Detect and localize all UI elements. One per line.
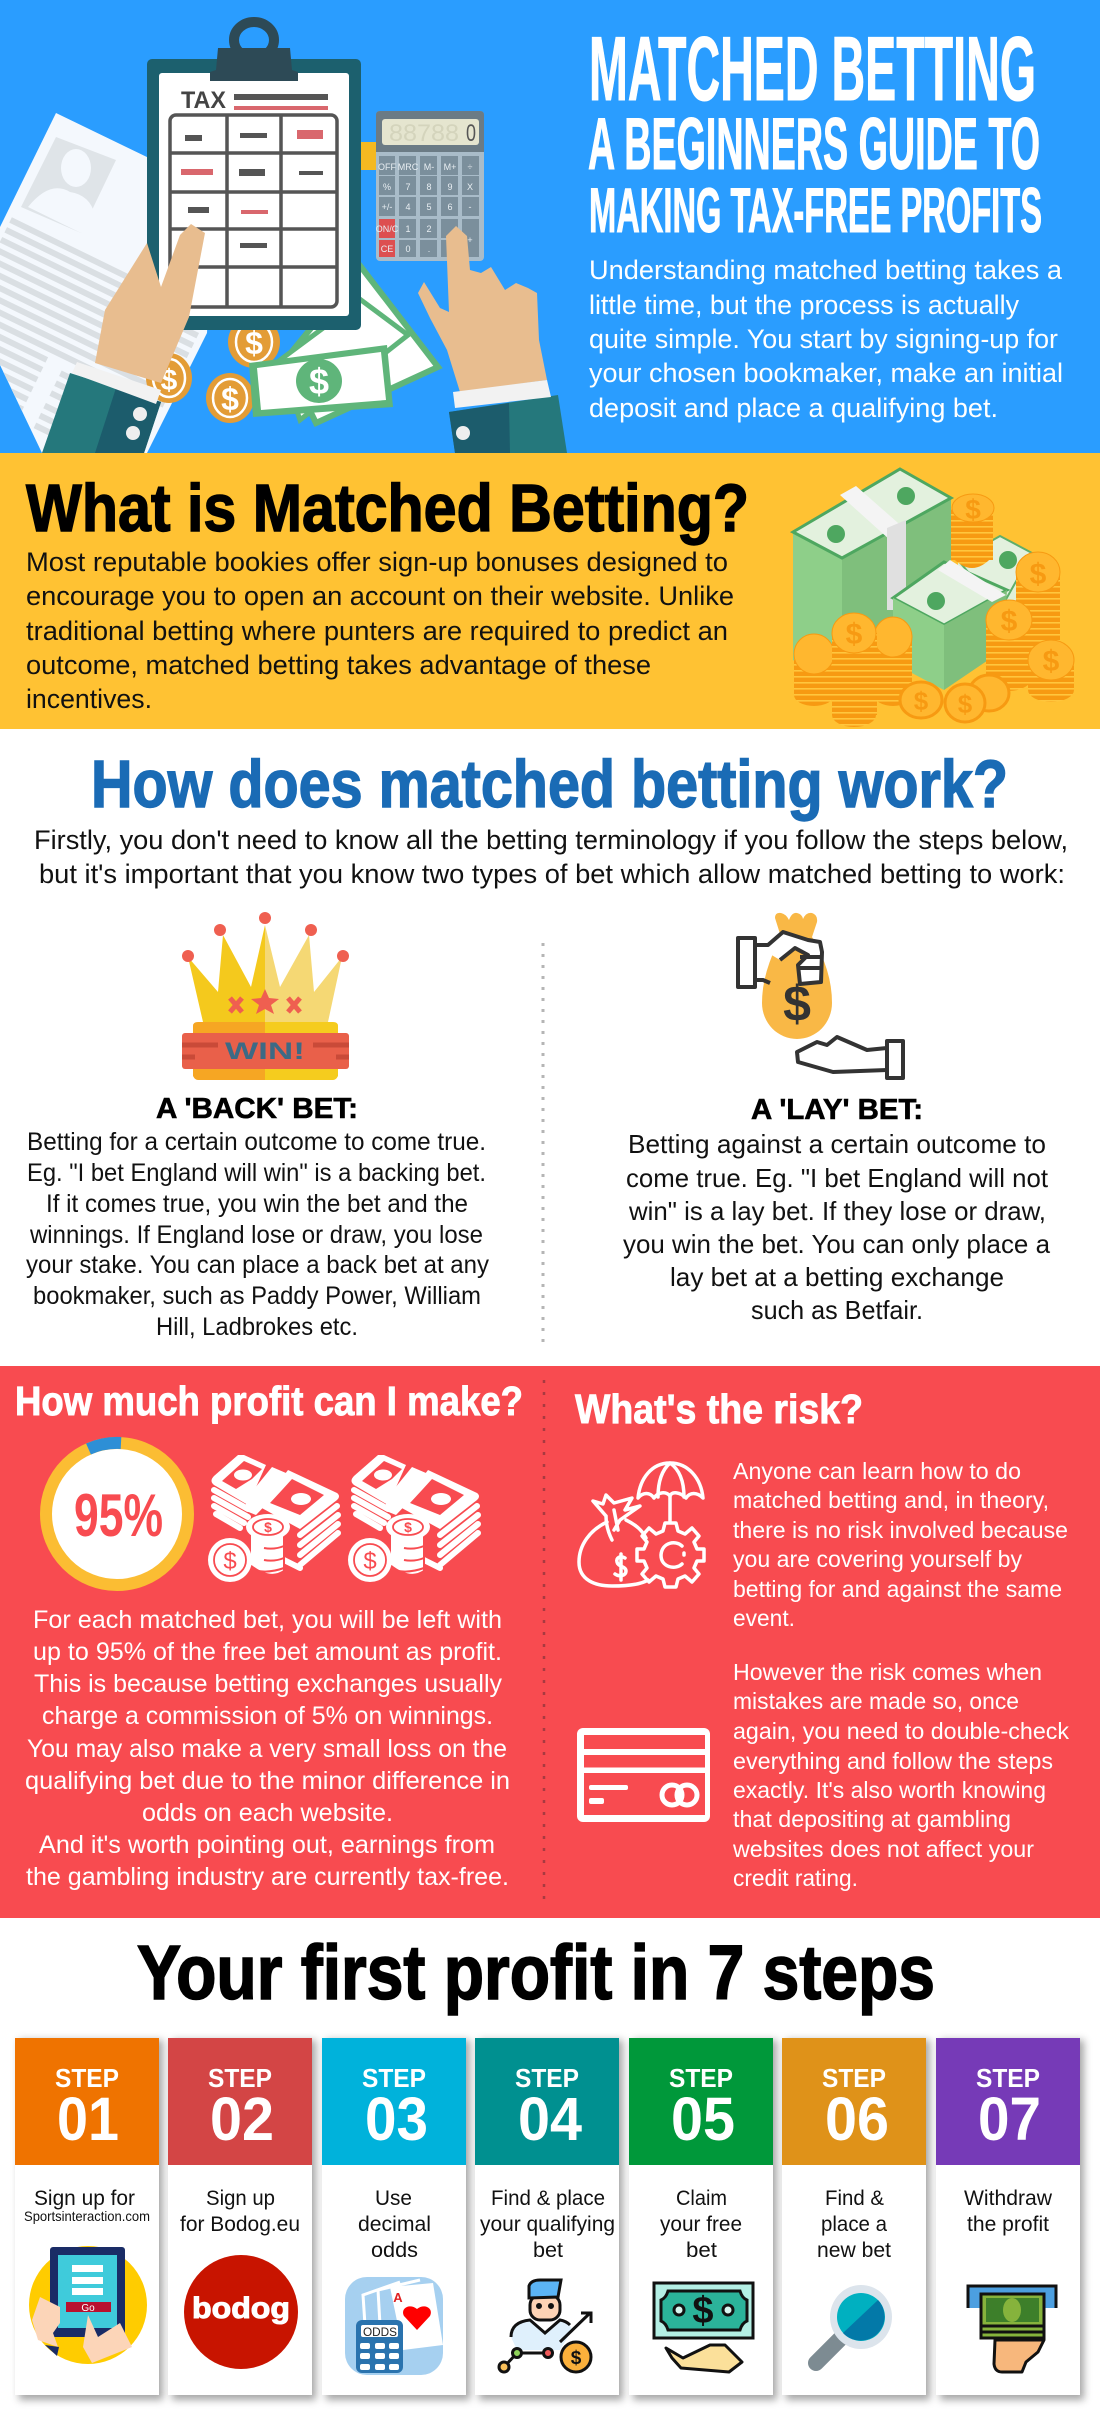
calculator: +/- <box>382 202 392 212</box>
risk text: exactly. It's also worth knowing <box>733 1777 1046 1803</box>
clipboard: TAX <box>181 87 226 114</box>
divider <box>542 943 544 1350</box>
step 6: STEP <box>822 2063 886 2093</box>
icon: money stacks and coins <box>793 469 1074 727</box>
back bet text <box>26 1128 489 1341</box>
icon: cards and odds calculator: ODDS <box>363 2325 397 2339</box>
icon: magnifying glass <box>816 2285 892 2363</box>
icon: money stacks and coins: $ <box>846 618 863 651</box>
calculator: - <box>468 202 472 212</box>
intro text: little time, but the process is actually <box>589 290 1019 320</box>
intro text: your chosen bookmaker, make an initial <box>589 358 1063 388</box>
back bet text: Betting for a certain outcome to come true. <box>27 1128 486 1156</box>
icon: tablet sign-up <box>29 2246 147 2364</box>
risk text: websites does not affect your <box>732 1836 1034 1862</box>
illustration: tax paperwork, calculator and cash <box>0 17 567 453</box>
step 4: bet <box>533 2239 563 2262</box>
step 1: Sign up for <box>34 2187 135 2210</box>
calculator: 88788 <box>389 120 459 147</box>
calculator: 8 <box>426 182 432 192</box>
step 5: bet <box>686 2239 717 2262</box>
profit text: charge a commission of 5% on winnings. <box>42 1702 493 1730</box>
coins <box>146 330 280 423</box>
body text: Most reputable bookies offer sign-up bonuses designed to <box>26 547 728 577</box>
intro text: but it's important that you know two types of bet which allow matched betting to work: <box>39 859 1065 889</box>
stray bills <box>280 142 438 423</box>
coins: $ <box>221 381 239 417</box>
step 2 <box>168 2038 312 2395</box>
step 3: decimal <box>358 2213 431 2236</box>
panel: what is matched betting <box>0 453 1100 729</box>
icon: money bag, umbrella and gear <box>579 1463 704 1587</box>
step 4: STEP <box>515 2063 579 2093</box>
step 3: STEP <box>362 2063 426 2093</box>
icon: person with rising arrow <box>499 2280 591 2372</box>
body text: traditional betting where punters are required to predict an <box>26 616 728 646</box>
panel: profit and risk <box>0 1366 1100 1918</box>
intro text: Understanding matched betting takes a <box>589 255 1063 285</box>
risk text: that depositing at gambling <box>733 1806 1011 1832</box>
body text: incentives. <box>26 684 152 714</box>
heading: what's the risk: What's the risk? <box>575 1386 863 1432</box>
icon: cash and coins <box>348 1455 479 1582</box>
risk text: credit rating. <box>733 1865 858 1891</box>
icon: money stacks and coins: $ <box>1001 605 1018 638</box>
lay bet text: such as Betfair. <box>751 1295 923 1325</box>
icon: tablet sign-up: Go <box>81 2303 95 2314</box>
calculator: M+ <box>444 162 456 172</box>
step 2: 02 <box>210 2085 274 2153</box>
profit text <box>25 1606 510 1891</box>
step 1: Sportsinteraction.com <box>24 2208 150 2224</box>
step 3: 03 <box>365 2085 428 2153</box>
body text: outcome, matched betting takes advantage of these <box>26 650 651 680</box>
back bet heading: A 'BACK' BET: <box>156 1093 358 1125</box>
profit text: For each matched bet, you will be left with <box>33 1606 502 1634</box>
step 4: Find & place <box>491 2187 605 2210</box>
intro text <box>589 255 1063 423</box>
icon: hands exchanging money bag: $ <box>783 976 811 1032</box>
lay bet text: win" is a lay bet. If they lose or draw, <box>628 1196 1046 1226</box>
step 3: odds <box>371 2239 418 2262</box>
calculator: OFF <box>378 162 396 172</box>
step 5 <box>629 2038 773 2395</box>
calculator: ÷ <box>468 162 473 172</box>
coins: $ <box>245 325 263 361</box>
lay bet heading: A 'LAY' BET: <box>751 1094 923 1126</box>
risk text: everything and follow the steps <box>733 1748 1053 1774</box>
back bet text: winnings. If England lose or draw, you lose <box>29 1221 483 1249</box>
icon: crown with WIN banner: WIN! <box>225 1038 305 1065</box>
back bet text: your stake. You can place a back bet at any <box>26 1251 489 1279</box>
heading: how much profit: How much profit can I make? <box>15 1378 523 1424</box>
icon: bodog logo: bodog <box>192 2292 290 2325</box>
left hand and sleeve <box>42 224 205 453</box>
body text <box>26 547 734 714</box>
step 7: the profit <box>967 2213 1049 2236</box>
profit text: This is because betting exchanges usually <box>34 1670 502 1698</box>
back bet text: bookmaker, such as Paddy Power, William <box>33 1282 481 1310</box>
calculator: 6 <box>447 202 453 212</box>
calculator: % <box>383 182 391 192</box>
risk text: there is no risk involved because <box>733 1517 1068 1543</box>
calculator <box>376 111 484 261</box>
risk text <box>732 1458 1069 1891</box>
lay bet text: you win the bet. You can only place a <box>623 1229 1051 1259</box>
heading: Your first profit in 7 steps <box>137 1930 935 2016</box>
profit text: up to 95% of the free bet amount as profit. <box>33 1638 502 1666</box>
step 6: place a <box>821 2213 887 2236</box>
icon: banknote and hand: $ <box>692 2290 714 2332</box>
step 4: your qualifying <box>480 2213 615 2236</box>
calculator: X <box>467 182 473 192</box>
step 6: new bet <box>817 2239 891 2262</box>
title <box>588 36 1041 233</box>
intro text <box>34 825 1068 889</box>
risk text: you are covering yourself by <box>733 1546 1022 1572</box>
calculator: 9 <box>447 182 453 192</box>
icon: money stacks and coins: $ <box>1030 558 1047 591</box>
card shadows <box>19 2040 1084 2400</box>
step 3 <box>322 2038 466 2395</box>
calculator: M- <box>424 162 434 172</box>
risk text: event. <box>733 1605 795 1631</box>
back bet text: Hill, Ladbrokes etc. <box>156 1313 358 1341</box>
icon: credit card <box>577 1728 710 1822</box>
step 6: 06 <box>825 2085 889 2153</box>
calculator: MRC <box>398 162 419 172</box>
step 1: 01 <box>57 2085 119 2153</box>
calculator: . <box>428 244 430 254</box>
panel: seven steps <box>15 1930 1084 2400</box>
icon: cash and coins <box>208 1455 339 1582</box>
intro text: Firstly, you don't need to know all the betting terminology if you follow the steps below, <box>34 825 1068 855</box>
right hand and sleeve <box>418 226 567 453</box>
step 4: 04 <box>518 2085 582 2153</box>
calculator: 1 <box>405 224 411 234</box>
calculator: 0 <box>405 244 411 254</box>
main bill <box>249 345 393 417</box>
profit text: odds on each website. <box>142 1799 393 1827</box>
icon: crown with WIN banner <box>182 912 349 1080</box>
icon: money stacks and coins: $ <box>914 686 929 716</box>
step 2: for Bodog.eu <box>180 2213 300 2236</box>
body text: encourage you to open an account on their website. Unlike <box>26 581 734 611</box>
intro text: deposit and place a qualifying bet. <box>589 393 998 423</box>
calculator: 4 <box>405 202 411 212</box>
icon: cards and odds calculator: A <box>393 2290 403 2305</box>
risk text: Anyone can learn how to do <box>733 1458 1021 1484</box>
calculator: 0 <box>466 120 476 147</box>
step 1: STEP <box>55 2063 119 2093</box>
calculator: 5 <box>426 202 432 212</box>
calculator: 7 <box>405 182 411 192</box>
calculator: 2 <box>426 224 432 234</box>
calculator: CE <box>381 244 393 254</box>
icon: bodog logo <box>184 2255 298 2369</box>
step 5: 05 <box>671 2085 735 2153</box>
step 1 <box>15 2038 159 2395</box>
step 6 <box>782 2038 926 2395</box>
risk text: However the risk comes when <box>733 1659 1042 1685</box>
step 3: Use <box>375 2187 412 2210</box>
chart: 95 percent ring: 95% <box>74 1482 163 1549</box>
back bet text: If it comes true, you win the bet and the <box>46 1190 468 1218</box>
profit text: the gambling industry are currently tax-free. <box>26 1863 509 1891</box>
main bill: $ <box>309 361 329 402</box>
lay bet text: lay bet at a betting exchange <box>670 1262 1004 1292</box>
risk text: betting for and against the same <box>733 1576 1062 1602</box>
step 7: Withdraw <box>964 2187 1053 2210</box>
back bet text: Eg. "I bet England will win" is a backing bet. <box>27 1159 486 1187</box>
panel: how does matched betting work <box>26 747 1068 1350</box>
calculator: ON/C <box>376 224 399 234</box>
step 5: your free <box>660 2213 742 2236</box>
lay bet text: come true. Eg. "I bet England will not <box>626 1163 1049 1193</box>
step 4 <box>475 2038 619 2395</box>
step 7: STEP <box>976 2063 1040 2093</box>
step 7: 07 <box>978 2085 1041 2153</box>
panel: hero <box>0 0 1100 453</box>
step 5: STEP <box>669 2063 733 2093</box>
lay bet text <box>623 1129 1051 1325</box>
icon: cash from ATM <box>968 2286 1056 2372</box>
step 2: STEP <box>208 2063 272 2093</box>
lay bet column <box>623 1094 1051 1325</box>
divider <box>543 1380 545 1905</box>
clipboard <box>147 22 361 330</box>
coins: $ <box>161 364 178 397</box>
profit text: And it's worth pointing out, earnings from <box>39 1831 495 1859</box>
icon: money stacks and coins: $ <box>958 689 973 719</box>
icon: person with rising arrow: $ <box>571 2348 582 2369</box>
back bet column <box>26 1093 489 1341</box>
icon: banknote and hand <box>654 2283 753 2372</box>
step 7 <box>936 2038 1080 2395</box>
intro text: quite simple. You start by signing-up for <box>589 324 1058 354</box>
icon: money stacks and coins: $ <box>1043 645 1060 678</box>
risk text: mistakes are made so, once <box>733 1688 1019 1714</box>
step 6: Find & <box>825 2187 884 2210</box>
icon: cards and odds calculator <box>345 2277 443 2375</box>
lay bet text: Betting against a certain outcome to <box>628 1129 1046 1159</box>
icon: hands exchanging money bag <box>738 913 903 1078</box>
calculator: + <box>467 235 473 245</box>
heading: What is Matched Betting? <box>26 471 749 546</box>
step 5: Claim <box>676 2187 727 2210</box>
profit text: qualifying bet due to the minor difference in <box>25 1767 510 1795</box>
risk text: again, you need to double-check <box>733 1718 1069 1744</box>
icon: money stacks and coins: $ <box>965 494 981 525</box>
step 2: Sign up <box>206 2187 275 2210</box>
risk text: matched betting and, in theory, <box>733 1487 1049 1513</box>
chart: 95 percent ring <box>46 1443 188 1585</box>
profit text: You may also make a very small loss on the <box>27 1735 507 1763</box>
